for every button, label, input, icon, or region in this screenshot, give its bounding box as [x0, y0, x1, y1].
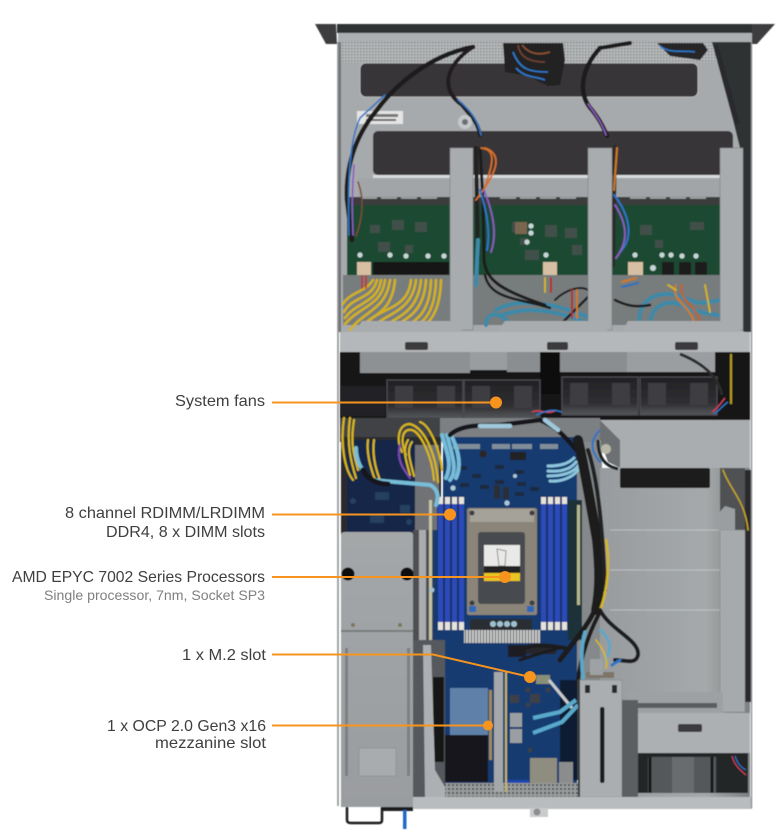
GPU power boards — [347, 197, 720, 280]
left DIMM slots — [437, 497, 464, 630]
PSU side rail — [413, 500, 445, 645]
air vent slots — [358, 63, 733, 198]
callout: DIMM slots: DDR4, 8 x DIMM slots — [106, 524, 265, 541]
callout: system fans: System fans — [175, 393, 265, 410]
server chassis photo — [315, 24, 775, 829]
motherboard — [413, 437, 577, 797]
callout: system fans — [175, 393, 502, 410]
PSU handle and latch — [347, 807, 413, 829]
top power connectors — [503, 43, 708, 86]
callout: M.2 slot — [182, 647, 536, 683]
right riser bracket — [717, 506, 745, 712]
callout: processor: Single processor, 7nm, Socket SP3 — [44, 587, 265, 603]
OCP mezzanine card — [433, 672, 507, 792]
callout: DIMM slots: 8 channel RDIMM/LRDIMM — [65, 505, 265, 522]
cables around motherboard — [343, 418, 748, 685]
GPU riser brackets — [450, 148, 743, 330]
callout: OCP slot: mezzanine slot — [155, 735, 267, 752]
VRM heatsink — [464, 619, 540, 643]
blue data cables — [485, 275, 722, 325]
chassis front rim — [338, 42, 752, 817]
top cable harnesses — [347, 43, 737, 305]
callout: OCP slot: 1 x OCP 2.0 Gen3 x16 — [107, 718, 266, 735]
left sub board — [341, 437, 441, 545]
yellow power cables — [343, 276, 441, 330]
lower floor behind boards — [343, 275, 720, 325]
right DIMM slots — [540, 497, 582, 640]
mounting ears — [315, 24, 775, 44]
rear PSU cover — [598, 420, 750, 469]
CPU socket — [467, 508, 537, 615]
lower motherboard parts — [445, 645, 578, 797]
callout: processor — [12, 569, 511, 603]
power supply unit — [341, 532, 414, 807]
upper chassis floor — [337, 24, 752, 332]
GPU bay cross bar — [340, 321, 750, 352]
callout: M.2 slot: 1 x M.2 slot — [182, 647, 267, 664]
left rear bracket — [423, 645, 445, 800]
callout: OCP slot — [107, 718, 493, 752]
mid chassis floor — [340, 418, 752, 803]
label sticker — [357, 111, 403, 124]
callout: processor: AMD EPYC 7002 Series Processors — [12, 569, 265, 586]
hex standoff — [458, 115, 472, 129]
callout: DIMM slots — [65, 505, 456, 541]
GPU 1 module — [622, 692, 750, 797]
rear riser holder — [578, 659, 622, 797]
fan bay — [340, 352, 750, 420]
